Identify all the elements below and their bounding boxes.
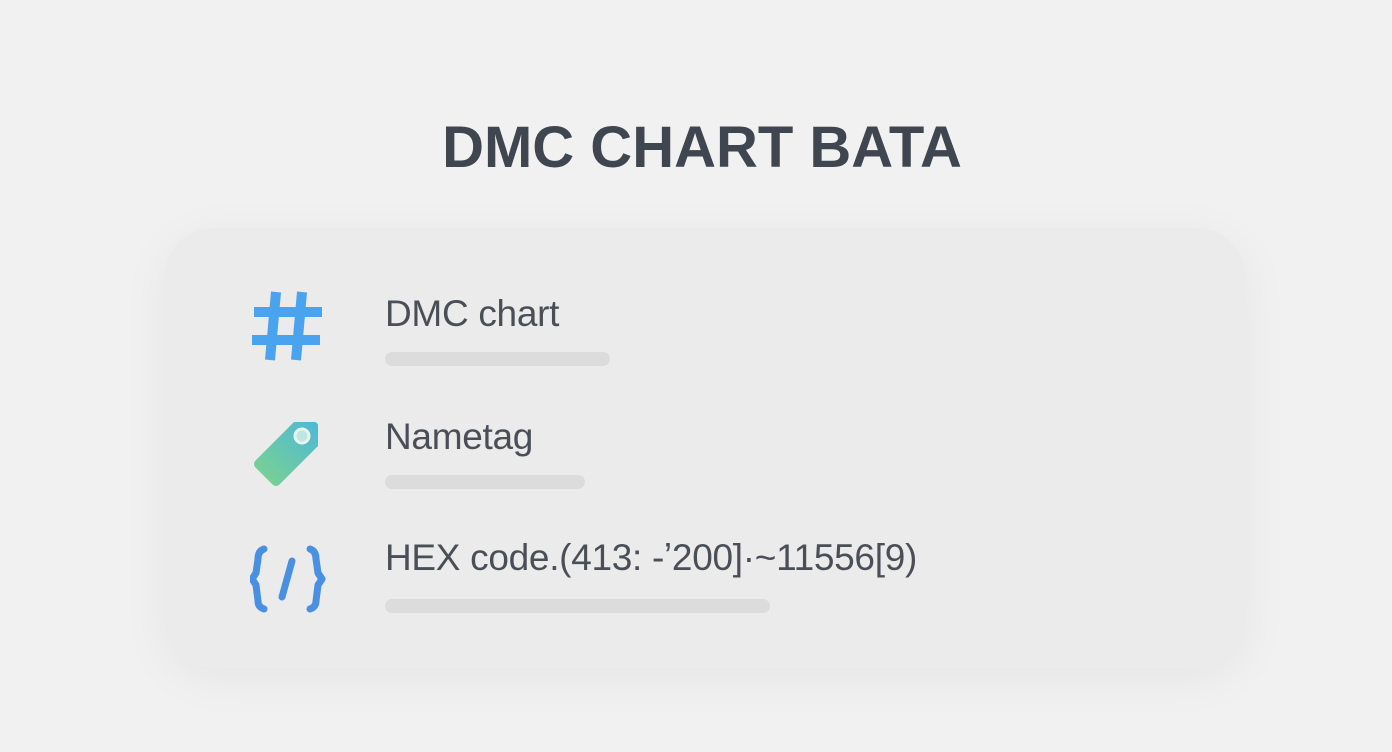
bar: [385, 352, 610, 366]
label: DMC chart: [385, 293, 559, 334]
title: DMC CHART BATA: [442, 115, 962, 180]
icon: hash: [252, 292, 322, 360]
label: Nametag: [385, 416, 533, 457]
icon: code brackets: [250, 546, 326, 612]
row: DMC chart: [252, 292, 610, 366]
icon: tag: [254, 422, 318, 486]
panel: data card: [165, 228, 1245, 668]
label: HEX code.(413: -ʼ200]·~11556[9): [385, 537, 917, 578]
bar: [385, 599, 770, 613]
row: HEX code: [250, 537, 917, 613]
row: Nametag: [254, 416, 585, 489]
bar: [385, 475, 585, 489]
